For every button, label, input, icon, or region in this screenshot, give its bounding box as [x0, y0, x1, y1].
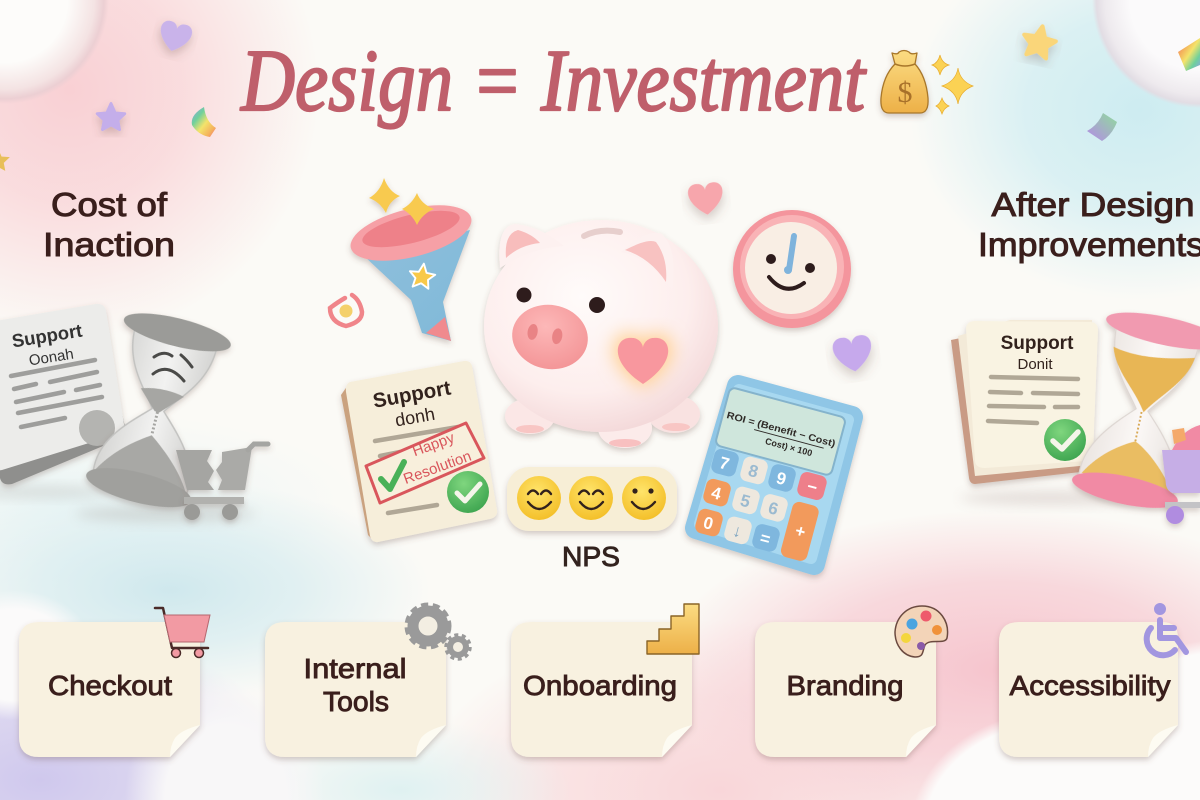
feet: [505, 398, 555, 434]
colorful cart: [1162, 425, 1200, 524]
icon: wheelchair: [1147, 606, 1186, 655]
grey support document: Support: [10, 320, 84, 351]
card: accessibility: Accessibility: [1010, 670, 1170, 701]
icon: purple heart: [831, 334, 875, 374]
stars: [369, 178, 400, 213]
keypad: 5: [738, 491, 752, 512]
icon: purple star: [97, 104, 125, 130]
heading: after design improvements: Improvements: [978, 226, 1200, 263]
illustration: happy resolution document: [341, 361, 497, 542]
face 3: [622, 476, 666, 520]
illustration: piggy bank: [484, 220, 718, 448]
icon: gold star right: [1020, 23, 1058, 60]
card: branding: [755, 606, 948, 757]
heading: after design improvements: [978, 186, 1200, 263]
heading: after design improvements: After Design: [992, 186, 1194, 223]
heading: cost of inaction: Cost of: [51, 186, 168, 223]
card: checkout: [19, 608, 210, 757]
icon: stairs: [647, 604, 699, 654]
icon: palette: [895, 606, 948, 657]
illustration: roi calculator: [692, 386, 852, 564]
red stamp: Happy: [410, 429, 457, 460]
sad face: [153, 353, 192, 381]
icon: confetti green: [1087, 113, 1117, 141]
ears: [499, 224, 564, 268]
snout: [507, 299, 593, 375]
keypad: 7: [717, 453, 731, 474]
keypad: =: [758, 528, 773, 549]
keypad: 4: [709, 483, 724, 504]
heading: cost of inaction: [43, 186, 175, 263]
eyes: [516, 288, 532, 302]
face 1: [517, 476, 561, 520]
cream support document stack: Support: [1001, 333, 1074, 354]
card: accessibility: [999, 606, 1186, 757]
icon: confetti rainbow left: [192, 107, 216, 137]
icon: money bag: [881, 50, 928, 113]
card: internal tools: Internal: [304, 653, 406, 684]
cream support document stack: [951, 320, 1098, 484]
icon: small pink ring: [330, 295, 362, 326]
screen: [715, 387, 846, 476]
keypad: ↓: [731, 521, 744, 541]
illustration: funnel: [345, 178, 477, 341]
face 2: [569, 476, 613, 520]
illustration: after design improvements: [951, 305, 1200, 524]
keypad: 6: [766, 498, 780, 519]
keypad: 9: [774, 468, 788, 489]
keypad: 8: [746, 461, 760, 482]
icon: gears: [407, 605, 470, 659]
nps label: NPS: [562, 541, 620, 572]
illustration: happy resolution document: donh: [394, 404, 436, 430]
icon: pink heart: [687, 181, 725, 216]
red stamp: Resolution: [401, 448, 474, 488]
glowing heart: [613, 334, 673, 388]
card: checkout: Checkout: [48, 670, 172, 701]
cream support document stack: Donit: [1017, 356, 1053, 373]
heading: cost of inaction: Inaction: [43, 226, 175, 263]
icon: purple heart top: [156, 19, 194, 55]
card: branding: Branding: [786, 670, 904, 701]
icon: gold star left edge: [0, 151, 8, 169]
keypad: 0: [701, 513, 715, 534]
grey support document: [0, 304, 127, 484]
card: internal tools: [265, 605, 470, 757]
icon: rainbow flag: [1178, 38, 1200, 71]
grey hourglass: [82, 305, 234, 515]
body: [484, 220, 718, 432]
icon: money bag: $: [898, 76, 912, 109]
icon: shopping cart: [155, 608, 210, 658]
illustration: happy resolution document: Support: [371, 376, 453, 413]
icon: smiling clock: [733, 210, 851, 328]
illustration: roi calculator: ROI = (Benefit − Cost): [725, 410, 836, 450]
red stamp: [366, 423, 484, 503]
keypad: −: [805, 477, 820, 498]
broken cart: [176, 444, 268, 520]
illustration: roi calculator: Cost) × 100: [764, 436, 813, 458]
card: onboarding: Onboarding: [523, 670, 677, 701]
nps face bar: [507, 467, 677, 531]
card: internal tools: Tools: [323, 686, 389, 717]
keypad: [693, 447, 828, 562]
keypad: +: [793, 521, 808, 542]
grey support document: Oonah: [28, 346, 75, 369]
coin slot: [584, 231, 620, 236]
card: onboarding: [511, 604, 699, 757]
icon: sparkles: [932, 55, 973, 114]
illustration: cost of inaction: [0, 304, 268, 522]
colorful hourglass: [1069, 305, 1200, 518]
title: Design = Investment: [240, 33, 867, 130]
